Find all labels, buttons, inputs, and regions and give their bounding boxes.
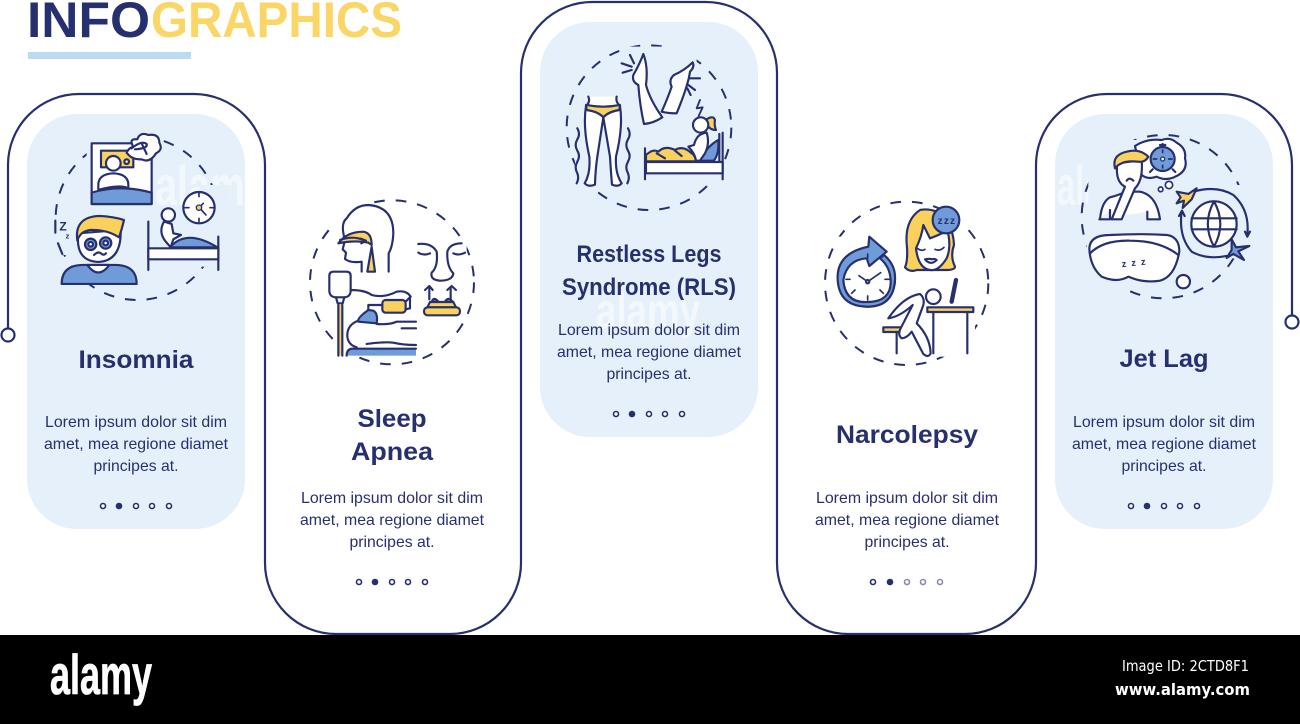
heading: Restless Legs Syndrome: Restless Legs: [576, 241, 722, 268]
icon: sleep apnea: [310, 200, 474, 364]
text block: Sleep Apnea: principes at.: [350, 534, 434, 551]
heading: Insomnia: Insomnia: [78, 346, 195, 374]
text block: Jet Lag: Lorem ipsum dolor sit dim: [1073, 414, 1255, 431]
pagination dots: Insomnia: [100, 503, 172, 509]
icon: insomnia: Z: [59, 220, 67, 234]
heading: Restless Legs Syndrome: Syndrome (RLS): [562, 274, 736, 301]
footer bar: www.alamy.com: [1115, 680, 1250, 699]
pagination dots: Narcolepsy: [870, 579, 942, 585]
footer bar: Image ID: 2CTD8F1: [1122, 657, 1249, 675]
panel background: Insomnia card: [27, 114, 245, 529]
watermark: Insomnia card: alam: [155, 154, 245, 217]
icon: restless legs: [567, 45, 731, 210]
text block: Narcolepsy: principes at.: [864, 534, 950, 551]
watermark: center card: alamy: [596, 283, 700, 339]
pagination dots: Jet Lag: [1128, 503, 1200, 509]
text block: Insomnia: [44, 414, 229, 475]
outline end node: [1286, 316, 1298, 328]
pagination dots: Sleep Apnea: [356, 579, 428, 585]
pagination dots: Restless Legs: [614, 411, 684, 417]
outline start node: [2, 328, 14, 342]
title underline bar: [28, 52, 191, 59]
heading: Sleep Apnea: Sleep: [358, 405, 426, 433]
text block: Sleep Apnea: amet, mea regione diamet: [300, 512, 485, 529]
text block: Narcolepsy: amet, mea regione diamet: [815, 512, 1000, 529]
text block: Insomnia: amet, mea regione diamet: [44, 436, 229, 453]
text block: Narcolepsy: Lorem ipsum dolor sit dim: [816, 490, 998, 507]
text block: Narcolepsy: [815, 490, 1000, 551]
icon: jet lag: [1082, 135, 1252, 298]
icon: jet lag: zzz: [1121, 257, 1146, 269]
text block: Restless Legs: amet, mea regione diamet: [557, 344, 742, 361]
icon: narcolepsy: zzz: [938, 216, 955, 227]
footer bar: alamy: [50, 643, 152, 706]
text block: Restless Legs: [557, 322, 742, 383]
icon: narcolepsy: [825, 202, 988, 365]
text block: Jet Lag: principes at.: [1122, 458, 1206, 475]
heading: Jet Lag: Jet Lag: [1120, 345, 1208, 373]
icon: insomnia: [50, 133, 230, 300]
text block: Restless Legs: principes at.: [606, 366, 692, 383]
heading: Narcolepsy: Narcolepsy: [836, 421, 978, 449]
text block: Insomnia: Lorem ipsum dolor sit dim: [45, 414, 227, 431]
heading: Sleep Apnea: Apnea: [351, 438, 434, 466]
text block: Sleep Apnea: [300, 490, 485, 551]
panel background: Restless Legs card: [540, 22, 758, 437]
title: [27, 0, 402, 48]
panel background: Jet Lag card: [1055, 114, 1273, 529]
text block: Jet Lag: amet, mea regione diamet: [1072, 436, 1257, 453]
footer bar: [0, 635, 1300, 724]
heading: Restless Legs Syndrome: [562, 241, 736, 301]
text block: Sleep Apnea: Lorem ipsum dolor sit dim: [301, 490, 483, 507]
text block: Restless Legs: Lorem ipsum dolor sit dim: [558, 322, 740, 339]
text block: Insomnia: principes at.: [94, 458, 178, 475]
heading: Sleep Apnea: [351, 405, 434, 466]
icon: insomnia: z: [66, 232, 70, 241]
watermark: Jet Lag card: alam: [1057, 154, 1132, 217]
text block: Jet Lag: [1072, 414, 1257, 475]
